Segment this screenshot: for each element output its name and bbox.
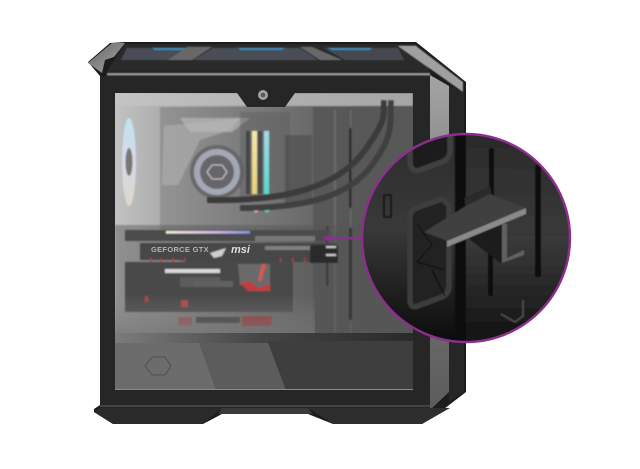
corner trim: [88, 43, 125, 73]
bracket back: [464, 186, 492, 205]
graphics card: [140, 243, 336, 266]
card red marks: [150, 258, 306, 262]
side panel: dark right: [449, 86, 464, 402]
fan vent left: [121, 48, 190, 60]
top panel with fans: [106, 44, 463, 92]
Cooler Master logo: [145, 357, 171, 375]
chassis right bay: [313, 107, 413, 340]
silver slats: [168, 47, 342, 60]
water tubes: [207, 100, 384, 200]
dim lower section: [115, 224, 352, 333]
illustration: PC case with magnified detail: [88, 42, 572, 424]
top badge button: [258, 90, 268, 100]
fan vent centre: [193, 48, 318, 60]
right half of panel: [466, 135, 569, 341]
bottom feet: [94, 405, 450, 424]
lower board: [125, 262, 293, 312]
graphics card top strip: [125, 230, 330, 241]
RAM sticks: [246, 131, 250, 194]
bracket arm top: [424, 194, 526, 241]
MSI dragon mark: [210, 248, 226, 258]
case body: [88, 42, 466, 424]
callout: pointer line: [322, 234, 366, 242]
motherboard upper: [160, 107, 266, 230]
lower cable hole: [410, 199, 449, 307]
front fan ring: [122, 118, 136, 206]
bracket arm front edge: [447, 208, 526, 247]
glass window: [115, 93, 413, 390]
magnified detail circle: [362, 130, 576, 346]
graphics card label: GEFORCE GTX: [151, 245, 209, 254]
small connector: [384, 195, 391, 217]
CPU cooler: [190, 145, 244, 199]
fade to lower: [115, 303, 315, 333]
top light band: [115, 93, 413, 106]
bracket below: [468, 224, 503, 263]
MSI label: msi: [231, 244, 251, 256]
lens border: [362, 134, 570, 342]
PSU shroud: [199, 343, 286, 388]
lower slot outline: [501, 300, 523, 322]
fan vent right: [324, 48, 404, 60]
slots: [489, 148, 494, 198]
seam: [455, 130, 466, 346]
front frame: [100, 76, 430, 408]
side panel: silver strip: [430, 75, 449, 410]
upper cable hole: [410, 130, 450, 171]
